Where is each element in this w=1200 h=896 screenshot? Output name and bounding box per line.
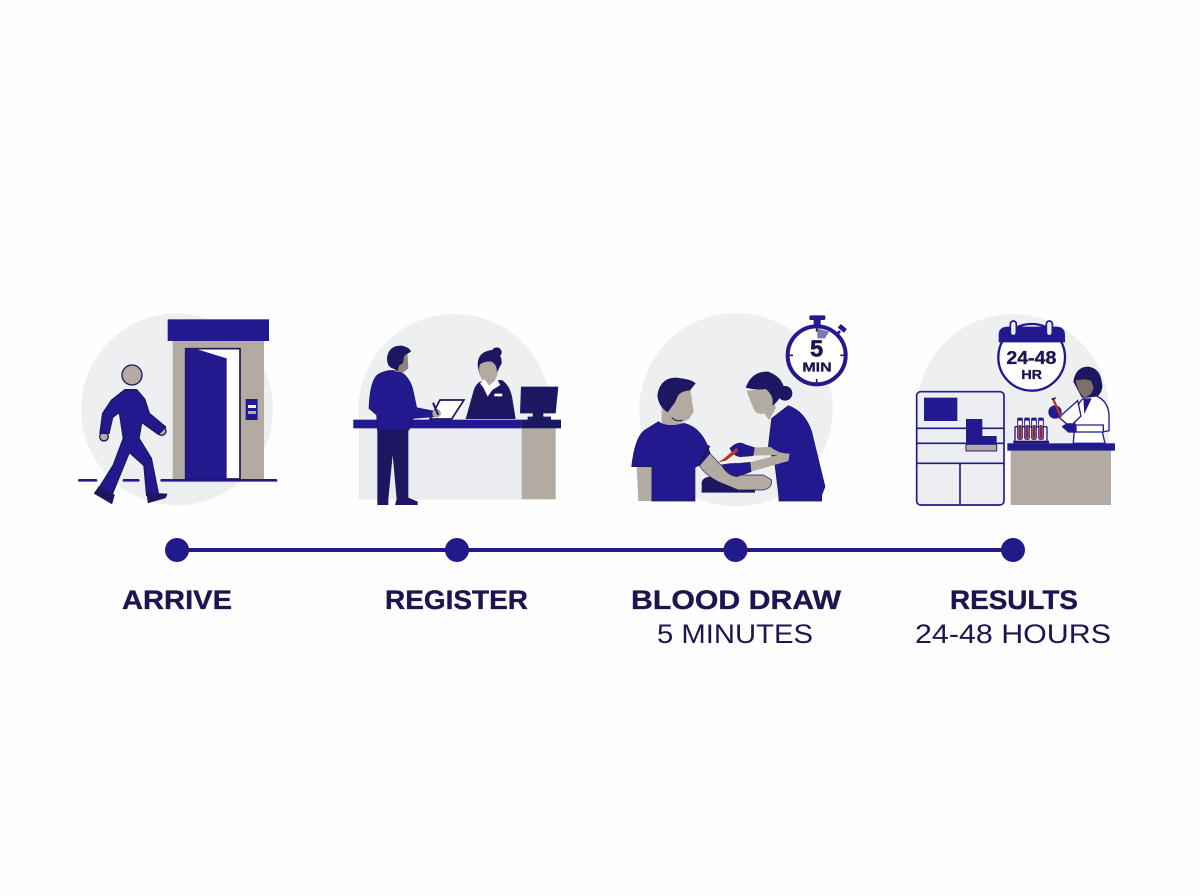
step marker: results: [1001, 538, 1025, 562]
desk side: [522, 428, 556, 499]
timeline: [165, 538, 1025, 562]
receptionist: [466, 347, 516, 419]
background circle: [81, 313, 273, 505]
desk front: [359, 428, 522, 499]
patient: [632, 378, 772, 501]
panel: register illustration: [353, 314, 561, 505]
open door: [186, 349, 227, 479]
scientist: [1048, 367, 1109, 443]
label: 24-48 hours: 24-48 HOURS: [915, 619, 1111, 649]
step marker: blood draw: [724, 538, 748, 562]
panel: blood draw illustration: [632, 313, 847, 506]
desk top: [353, 420, 561, 428]
calendar badge: 24-48 hr: HR: [1021, 367, 1042, 382]
label: results: RESULTS: [950, 585, 1078, 615]
label: 5 minutes: 5 MINUTES: [657, 619, 813, 649]
door opening: [186, 349, 240, 479]
panel: results illustration: [917, 314, 1115, 505]
walking person: [95, 365, 167, 503]
label: register: REGISTER: [385, 585, 528, 615]
step marker: arrive: [165, 538, 189, 562]
man at desk: [369, 346, 441, 505]
label: arrive: ARRIVE: [122, 585, 232, 615]
stopwatch: 5 min: 5: [810, 336, 823, 362]
step marker: register: [445, 538, 469, 562]
stopwatch: 5 min: [788, 315, 847, 384]
computer monitor: [520, 387, 558, 420]
nurse: [718, 372, 825, 501]
background circle: [639, 313, 833, 506]
armrest: [702, 477, 755, 493]
calendar badge: 24-48 hr: [998, 321, 1065, 391]
lab analyser machine: [917, 392, 1004, 505]
background circle: [917, 314, 1109, 443]
calendar badge: 24-48 hr: 24-48: [1006, 347, 1056, 368]
ground line: [79, 476, 276, 484]
background circle: [358, 314, 550, 420]
door access panel: [246, 399, 258, 420]
stopwatch: 5 min: MIN: [802, 360, 832, 375]
door lintel: [168, 319, 269, 341]
clipboard: [430, 400, 464, 419]
panel: arrive illustration: [79, 313, 276, 505]
lab bench: [1007, 443, 1115, 505]
label: blood draw: BLOOD DRAW: [631, 585, 842, 615]
door frame: [173, 341, 264, 479]
test tube rack: [1013, 418, 1049, 443]
